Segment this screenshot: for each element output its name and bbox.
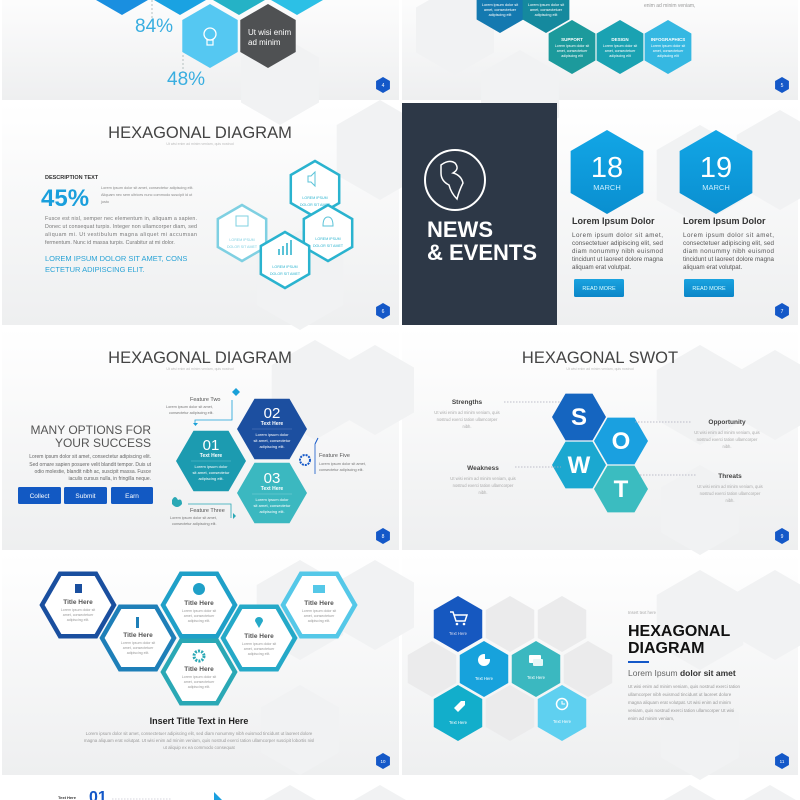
page badge 9 bbox=[775, 528, 789, 544]
page badge 6: 6 bbox=[382, 309, 385, 315]
label weakness: nibh. bbox=[478, 490, 488, 495]
hex: clock: Text Here bbox=[553, 719, 572, 724]
hexagon: infographics bbox=[645, 20, 691, 74]
outline hexagon: bell: DOLOR SIT AMET bbox=[313, 244, 344, 248]
hex 3: adipiscing elit. bbox=[188, 619, 210, 623]
hexagon O bbox=[594, 418, 648, 464]
text block: veniam, quis nostrud exerci tation ullamcorper Ut wisi bbox=[628, 708, 734, 713]
hex 4: adipiscing elit. bbox=[188, 685, 210, 689]
hexagon: design: adipiscing elit bbox=[609, 54, 631, 58]
hexagon 02: Text Here bbox=[261, 421, 283, 427]
hexagon 03: sit amet, consectetur bbox=[254, 503, 291, 508]
description block: ECTETUR ADIPISCING ELIT. bbox=[45, 265, 145, 274]
event 18: Lorem ipsum dolor sit amet, bbox=[572, 232, 663, 239]
label threats: nostrud exerci tation ullamcorper bbox=[700, 491, 761, 496]
text fragment: enim ad minim veniam, bbox=[644, 3, 695, 9]
page badge 11 bbox=[775, 753, 789, 769]
description block: aliquam mi. Ut vestibulum magna aliquet mi accumsan bbox=[45, 232, 197, 238]
buttons: Submit bbox=[75, 493, 96, 500]
description block: Aliquam nec sem ultrices nunc commodo suscipit id ut bbox=[101, 193, 193, 197]
hexagon row 1: adipiscing elit bbox=[535, 13, 558, 17]
outline hexagon: book: DOLOR SIT AMET bbox=[227, 245, 258, 249]
page badge 7: 7 bbox=[781, 309, 784, 315]
hexagon 02: 02 bbox=[264, 405, 280, 422]
event 19: consectetuer adipiscing elit, sed bbox=[683, 240, 775, 247]
page badge 10 bbox=[376, 753, 390, 769]
hex: chat bbox=[512, 641, 560, 697]
text block: ullamcorper nibh euismod tincidunt ut laoreet dolore bbox=[628, 692, 732, 697]
hexagon row 1: amet, consectetuer bbox=[530, 8, 563, 12]
hex 3: Lorem ipsum dolor sit bbox=[182, 609, 216, 613]
hexagon 02 bbox=[237, 399, 307, 459]
feature two bbox=[166, 388, 240, 426]
feature three bbox=[170, 497, 236, 526]
outline hexagon: speaker: DOLOR SIT AMET bbox=[300, 203, 331, 207]
outline hexagon: speaker bbox=[291, 161, 339, 217]
outline hexagon: chart: DOLOR SIT AMET bbox=[270, 272, 301, 276]
buttons bbox=[18, 487, 153, 504]
page badge 5 bbox=[775, 77, 789, 93]
hex 2: Title Here bbox=[123, 632, 153, 639]
hex 5: Lorem ipsum dolor sit bbox=[242, 642, 276, 646]
text block: HEXAGONAL bbox=[628, 623, 730, 640]
hex 5 bbox=[223, 607, 295, 669]
label strengths bbox=[434, 399, 561, 429]
description block: fermentum. Nunc id massa turpis. Curabitur at mi dolor. bbox=[45, 240, 175, 246]
heading and paragraph: Insert Title Text in Here bbox=[150, 716, 248, 726]
event 18: 18 bbox=[591, 152, 623, 184]
hexagon S bbox=[552, 394, 606, 440]
event 18: tincidunt ut laoreet dolore magna bbox=[572, 256, 664, 263]
hexagon row 1: Lorem ipsum dolor sit bbox=[528, 3, 565, 7]
hexagon O: O bbox=[612, 428, 630, 455]
feature two: Feature Two bbox=[190, 397, 220, 403]
left text block: YOUR SUCCESS bbox=[55, 436, 151, 450]
event 19: Lorem ipsum dolor sit amet, bbox=[683, 232, 774, 239]
event 18: consectetuer adipiscing elit, sed bbox=[572, 240, 664, 247]
label opportunity: nibh. bbox=[722, 444, 732, 449]
text block: enim ad minim veniam, bbox=[628, 716, 674, 721]
hex 2: Lorem ipsum dolor sit bbox=[121, 641, 155, 645]
slide 8: hexagonal diagram with features bbox=[18, 349, 390, 544]
event 18: aliquam erat volutpat. bbox=[572, 264, 631, 271]
page badge 11: 11 bbox=[780, 759, 785, 764]
feature five: consectetur adipiscing elit. bbox=[319, 468, 364, 472]
hexagon: gray text: Ut wisi enim bbox=[248, 28, 291, 37]
stat 84%: 84% bbox=[135, 16, 173, 37]
event 19: 19 bbox=[700, 152, 732, 184]
label opportunity: nostrud exerci tation ullamcorper bbox=[697, 437, 758, 442]
outline hexagon: bell bbox=[304, 205, 352, 261]
buttons: Collect bbox=[30, 493, 50, 500]
slide 11: hexagonal diagram honeycomb bbox=[408, 596, 789, 769]
hexagon W: W bbox=[568, 452, 591, 479]
hex 5: Title Here bbox=[244, 633, 274, 640]
label threats: nibh. bbox=[725, 498, 735, 503]
slide 9: hexagonal SWOT: Ut wisi enim ad minim veniam, quis nostrud bbox=[566, 367, 634, 371]
feature five bbox=[300, 438, 366, 474]
hex: tag bbox=[434, 685, 482, 741]
page badge 4 bbox=[376, 77, 390, 93]
event 18: READ MORE bbox=[582, 286, 616, 292]
hexagon: support: SUPPORT bbox=[561, 37, 583, 42]
event 18 bbox=[571, 130, 664, 297]
page badge 8: 8 bbox=[382, 534, 385, 540]
label weakness: Ut wisi enim ad minim veniam, quis bbox=[450, 476, 516, 481]
heading and paragraph: Lorem ipsum dolor sit amet, consectetuer adipiscing elit, sed diam nonummy nibh euismod tincidunt ut laoreet dolore bbox=[86, 731, 313, 736]
hex: tag: Text Here bbox=[449, 720, 468, 725]
top hexagons bbox=[94, 0, 325, 15]
hexagon row 1: adipiscing elit bbox=[489, 13, 512, 17]
feature three: Feature Three bbox=[190, 508, 225, 514]
hexagon W bbox=[552, 442, 606, 488]
hex 1: Title Here bbox=[63, 599, 93, 606]
slide 9: hexagonal SWOT bbox=[434, 349, 789, 544]
slide 6: hexagonal diagram bbox=[41, 124, 390, 319]
feature five: Feature Five bbox=[319, 453, 350, 459]
feature three: Lorem ipsum dolor sit amet, bbox=[170, 516, 217, 520]
heading and paragraph: magna aliquam erat volutpat. Ut wisi enim ad minim veniam, quis nostrud exerci tation ullamcorper suscipit lobortis nisl bbox=[84, 738, 314, 743]
left text block: MANY OPTIONS FOR bbox=[31, 423, 151, 437]
outline hexagon: speaker: LOREM IPSUM bbox=[302, 196, 328, 200]
hexagon: infographics: adipiscing elit bbox=[657, 54, 679, 58]
hex 4: Title Here bbox=[184, 666, 214, 673]
label threats: Threats bbox=[718, 473, 742, 480]
hexagon 03 bbox=[237, 463, 307, 523]
hexagon: design: Lorem ipsum dolor sit bbox=[603, 44, 637, 48]
hexagon 03: Lorem ipsum dolor bbox=[255, 497, 289, 502]
label threats bbox=[640, 473, 763, 503]
label weakness: Weakness bbox=[467, 465, 499, 472]
text block bbox=[628, 610, 741, 721]
hexagon row 1 bbox=[477, 0, 569, 33]
dark panel: & EVENTS bbox=[427, 240, 537, 265]
hex 5: adipiscing elit. bbox=[248, 652, 270, 656]
hex 2 bbox=[102, 607, 174, 669]
hex: cart bbox=[434, 596, 482, 652]
text block: Lorem Ipsum dolor sit amet bbox=[628, 668, 736, 678]
label opportunity bbox=[635, 419, 760, 449]
hexagon 03: adipiscing elit. bbox=[259, 509, 285, 514]
hexagon 02: Lorem ipsum dolor bbox=[255, 432, 289, 437]
hexagon 03: 03 bbox=[264, 470, 280, 487]
hexagon: gray text bbox=[240, 4, 296, 68]
hex 1: Lorem ipsum dolor sit bbox=[61, 608, 95, 612]
outline hexagon: bell: LOREM IPSUM bbox=[315, 237, 341, 241]
hexagon row 1: Lorem ipsum dolor sit bbox=[482, 3, 519, 7]
label strengths: nibh. bbox=[462, 424, 472, 429]
outline hexagon: book: LOREM IPSUM bbox=[229, 238, 255, 242]
hex: chat: Text Here bbox=[527, 675, 546, 680]
hex 6: Title Here bbox=[304, 600, 334, 607]
slide 12 (partial) bbox=[58, 789, 222, 800]
hexagon: infographics: Lorem ipsum dolor sit bbox=[651, 44, 685, 48]
hexagon: gray text: ad minim bbox=[248, 38, 281, 47]
slide 6: hexagonal diagram: Ut wisi enim ad minim veniam, quis nostrud bbox=[166, 142, 234, 146]
left text block: Sed ornare sapien posuere velit blandit tempor. Duis ut bbox=[29, 462, 152, 468]
hexagon 01: sit amet, consectetur bbox=[193, 470, 230, 475]
heading and paragraph bbox=[84, 716, 314, 750]
hex 1: adipiscing elit. bbox=[67, 618, 89, 622]
hexagon row 1: amet, consectetuer bbox=[484, 8, 517, 12]
hex: cart: Text Here bbox=[449, 631, 468, 636]
hex 6 bbox=[283, 574, 355, 636]
outline hexagon: chart: LOREM IPSUM bbox=[272, 265, 298, 269]
left text block: iaculis cursus nulla, in fringilla neque. bbox=[68, 476, 151, 482]
hexagon: support bbox=[549, 20, 595, 74]
hexagon: bulb bbox=[182, 4, 238, 68]
hex 3: Title Here bbox=[184, 600, 214, 607]
label strengths: nostrud exerci tation ullamcorper bbox=[437, 417, 498, 422]
hexagon 03: Text Here bbox=[261, 486, 283, 492]
hex 1 bbox=[42, 574, 114, 636]
title: HEXAGONAL DIAGRAM bbox=[108, 124, 292, 142]
hexagon 02: sit amet, consectetur bbox=[254, 438, 291, 443]
left text block: Lorem ipsum dolor sit amet, consectetur adipiscing elit. bbox=[29, 454, 151, 460]
hex 5: amet, consectetuer bbox=[244, 647, 275, 651]
hexagon 01: Text Here bbox=[200, 453, 222, 459]
feature five: Lorem ipsum dolor sit amet, bbox=[319, 462, 366, 466]
buttons: Earn bbox=[125, 493, 139, 500]
hex 3 bbox=[163, 574, 235, 636]
slide 4 (partial) bbox=[94, 0, 390, 93]
hexagon T bbox=[594, 466, 648, 512]
left text block bbox=[29, 423, 152, 482]
page badge 9: 9 bbox=[781, 534, 784, 540]
hex 1: amet, consectetuer bbox=[63, 613, 94, 617]
icon: globe bbox=[425, 150, 485, 210]
event 19: Lorem Ipsum Dolor bbox=[683, 216, 766, 226]
hex 6: amet, consectetuer bbox=[304, 614, 335, 618]
hexagon 01: adipiscing elit. bbox=[198, 476, 224, 481]
hexagon: infographics: INFOGRAPHICS bbox=[651, 37, 685, 42]
hex: pie bbox=[460, 641, 508, 697]
text block: Ut wisi enim ad minim veniam, quis nostrud exerci tation bbox=[628, 684, 741, 689]
event 18: MARCH bbox=[593, 183, 621, 192]
slide 8: hexagonal diagram with features: Ut wisi enim ad minim veniam, quis nostrud bbox=[166, 367, 234, 371]
event 19 bbox=[680, 130, 775, 297]
description block: Lorem ipsum dolor sit amet, consectetur adipiscing elit. bbox=[101, 186, 193, 190]
page badge 7 bbox=[775, 303, 789, 319]
event 19: diam nonummy nibh euismod bbox=[683, 248, 775, 255]
hexagon 01: 01 bbox=[203, 437, 219, 454]
title: HEXAGONAL SWOT bbox=[522, 349, 678, 367]
text block: DIAGRAM bbox=[628, 640, 704, 657]
hex 6: Lorem ipsum dolor sit bbox=[302, 609, 336, 613]
text block: Insert text here bbox=[628, 610, 657, 615]
event 19: READ MORE bbox=[692, 286, 726, 292]
outline hexagon: book bbox=[218, 205, 266, 261]
event 19: aliquam erat volutpat. bbox=[683, 264, 742, 271]
feature two: consectetur adipiscing elit. bbox=[169, 411, 214, 415]
slide 7: news & events bbox=[402, 103, 789, 325]
description block: DESCRIPTION TEXT bbox=[45, 175, 99, 181]
hexagon 01: Lorem ipsum dolor bbox=[194, 464, 228, 469]
event 18: diam nonummy nibh euismod bbox=[572, 248, 664, 255]
hexagon: support: amet, consectetuer bbox=[557, 49, 588, 53]
hexagon: design bbox=[597, 20, 643, 74]
hexagon: support: Lorem ipsum dolor sit bbox=[555, 44, 589, 48]
hex 3: amet, consectetuer bbox=[184, 614, 215, 618]
label weakness bbox=[450, 465, 561, 495]
label strengths: Ut wisi enim ad minim veniam, quis bbox=[434, 410, 500, 415]
dark panel bbox=[402, 103, 557, 325]
event 19: MARCH bbox=[702, 183, 730, 192]
hex 4: amet, consectetuer bbox=[184, 680, 215, 684]
hex 6: adipiscing elit. bbox=[308, 619, 330, 623]
description block: LOREM IPSUM DOLOR SIT AMET, CONS bbox=[45, 254, 187, 263]
hexagon 02: adipiscing elit. bbox=[259, 444, 285, 449]
label weakness: nostrud exerci tation ullamcorper bbox=[453, 483, 514, 488]
page badge 5: 5 bbox=[781, 83, 784, 89]
stat 48%: 48% bbox=[167, 69, 205, 90]
description block bbox=[41, 175, 197, 274]
hexagon: design: amet, consectetuer bbox=[605, 49, 636, 53]
left text block: odio molestie, blandit nibh ac, suscipit massa. Fusce bbox=[35, 469, 151, 475]
hex: clock bbox=[538, 685, 586, 741]
description block: Fusce est nisl, semper nec elementum in, aliquam a sapien. bbox=[45, 216, 197, 222]
hex: pie: Text Here bbox=[475, 676, 494, 681]
hexagon: support: adipiscing elit bbox=[561, 54, 583, 58]
label opportunity: Ut wisi enim ad minim veniam, quis bbox=[694, 430, 760, 435]
hex 4 bbox=[163, 641, 235, 703]
hexagon: design: DESIGN bbox=[611, 37, 629, 42]
page badge 8 bbox=[376, 528, 390, 544]
slide 10: outlined hexagon grid bbox=[42, 574, 390, 769]
description block: 45% bbox=[41, 185, 89, 212]
description block: Donec ut consequat turpis. Integer non ullamcorper diam, sed bbox=[45, 224, 197, 230]
hex 2: adipiscing elit. bbox=[127, 651, 149, 655]
text block: magna aliquam erat volutpat. Ut wisi enim ad minim bbox=[628, 700, 731, 705]
hexagon: infographics: amet, consectetuer bbox=[653, 49, 684, 53]
slide 5 (partial) bbox=[477, 0, 789, 93]
event 19: tincidunt ut laoreet dolore magna bbox=[683, 256, 775, 263]
description block: justo bbox=[100, 200, 109, 204]
page badge 10: 10 bbox=[380, 759, 386, 764]
hexagon 01 bbox=[176, 431, 246, 491]
outline hexagon: chart bbox=[261, 232, 309, 288]
dark panel: NEWS bbox=[427, 217, 493, 242]
slide 12 (partial): Text Here bbox=[58, 795, 77, 800]
gray background hexagons bbox=[408, 596, 612, 741]
label strengths: Strengths bbox=[452, 399, 483, 406]
label opportunity: Opportunity bbox=[708, 419, 746, 426]
hexagon S: S bbox=[571, 404, 587, 431]
title: HEXAGONAL DIAGRAM bbox=[108, 349, 292, 367]
feature two: Lorem ipsum dolor sit amet, bbox=[166, 405, 213, 409]
page badge 6 bbox=[376, 303, 390, 319]
hex 4: Lorem ipsum dolor sit bbox=[182, 675, 216, 679]
feature three: consectetur adipiscing elit. bbox=[172, 522, 217, 526]
page badge 4: 4 bbox=[382, 83, 385, 89]
label threats: Ut wisi enim ad minim veniam, quis bbox=[697, 484, 763, 489]
heading and paragraph: ut aliquip ex ea commodo consequat bbox=[163, 745, 236, 750]
hexagon T: T bbox=[614, 476, 629, 503]
event 18: Lorem Ipsum Dolor bbox=[572, 216, 655, 226]
hex 2: amet, consectetuer bbox=[123, 646, 154, 650]
